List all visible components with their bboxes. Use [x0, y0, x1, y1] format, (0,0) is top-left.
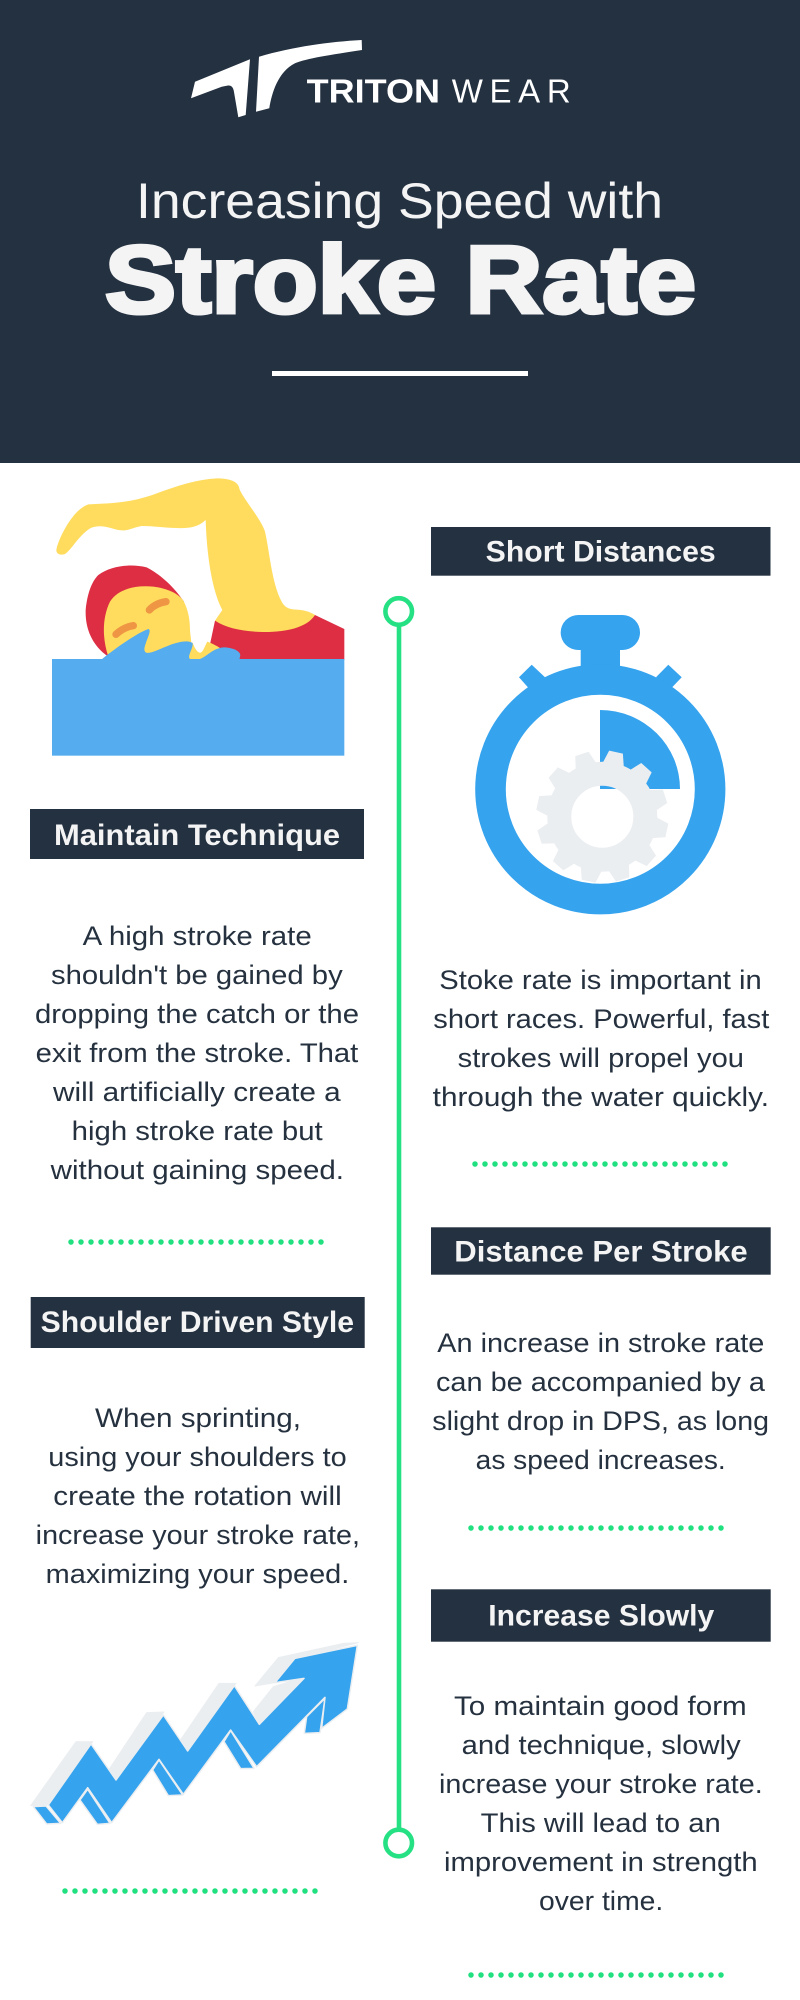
heading: Maintain Technique: Maintain Technique: [54, 819, 340, 852]
text: Increase Slowly body: improvement in strength: [444, 1847, 758, 1877]
text: Shoulder Driven Style body: When sprinting,: [95, 1403, 301, 1433]
title: Increasing Speed with: Increasing Speed with: [136, 173, 663, 229]
text: Distance Per Stroke body: can be accompanied by a: [436, 1367, 766, 1397]
text: Distance Per Stroke body: An increase in stroke rate: [437, 1328, 764, 1358]
text: Shoulder Driven Style body: using your shoulders to: [48, 1442, 347, 1472]
heading: Increase Slowly: Increase Slowly: [488, 1600, 715, 1633]
text: Increase Slowly body: over time.: [539, 1886, 663, 1916]
panel: Maintain Technique: [30, 809, 364, 1185]
heading: Short Distances: [431, 527, 770, 576]
text: Short Distances body: strokes will propel you: [458, 1043, 744, 1073]
text: Distance Per Stroke body: [432, 1328, 769, 1475]
text: Shoulder Driven Style body: [36, 1403, 360, 1589]
text: Short Distances body: short races. Powerful, fast: [433, 1004, 770, 1034]
text: Short Distances body: through the water quickly.: [433, 1082, 769, 1112]
text: Maintain Technique body: A high stroke rate: [83, 921, 312, 951]
heading: Maintain Technique: [30, 809, 364, 859]
heading: Distance Per Stroke: Distance Per Stroke: [454, 1236, 748, 1269]
text: Shoulder Driven Style body: create the rotation will: [53, 1481, 342, 1511]
heading: Short Distances: Short Distances: [486, 536, 716, 569]
text: Shoulder Driven Style body: maximizing your speed.: [46, 1559, 349, 1589]
text: Distance Per Stroke body: slight drop in DPS, as long: [432, 1406, 769, 1436]
timeline: [385, 598, 412, 1856]
icon: rising arrow: [31, 1643, 358, 1824]
icon: stopwatch with gear: [490, 615, 710, 899]
text: Maintain Technique body: shouldn't be gained by: [51, 960, 343, 990]
heading: Shoulder Driven Style: [31, 1297, 365, 1348]
panel: Distance Per Stroke: [431, 1227, 771, 1475]
text: Maintain Technique body: high stroke rate but: [72, 1116, 323, 1146]
icon: swimmer: [52, 478, 344, 756]
text: Shoulder Driven Style body: increase your stroke rate,: [36, 1520, 360, 1550]
text: Increase Slowly body: [439, 1691, 763, 1916]
text: Maintain Technique body: exit from the stroke. That: [36, 1038, 359, 1068]
title: Stroke Rate: Stroke Rate: [105, 226, 696, 334]
panel: Increase Slowly: [431, 1589, 771, 1916]
text: Maintain Technique body: will artificially create a: [52, 1077, 342, 1107]
text: Maintain Technique body: dropping the catch or the: [35, 999, 359, 1029]
panel: Shoulder Driven Style: [31, 1297, 365, 1589]
text: Short Distances body: [433, 965, 770, 1112]
heading: Shoulder Driven Style: Shoulder Driven Style: [41, 1306, 354, 1339]
text: Maintain Technique body: [35, 921, 359, 1185]
text: Maintain Technique body: without gaining speed.: [50, 1155, 344, 1185]
logo: Triton Wear: [191, 40, 571, 117]
header underline: [272, 371, 528, 376]
text: Increase Slowly body: To maintain good form: [454, 1691, 747, 1721]
panel: header: [0, 0, 800, 463]
text: Increase Slowly body: increase your stroke rate.: [439, 1769, 763, 1799]
heading: Distance Per Stroke: [431, 1227, 771, 1275]
heading: Increase Slowly: [431, 1589, 771, 1642]
logo: Triton Wear: WEAR: [452, 72, 571, 110]
text: Increase Slowly body: and technique, slowly: [462, 1730, 741, 1760]
text: Increase Slowly body: This will lead to an: [481, 1808, 721, 1838]
text: Distance Per Stroke body: as speed increases.: [476, 1445, 726, 1475]
logo: Triton Wear: TRITON: [307, 74, 440, 110]
text: Short Distances body: Stoke rate is important in: [439, 965, 762, 995]
